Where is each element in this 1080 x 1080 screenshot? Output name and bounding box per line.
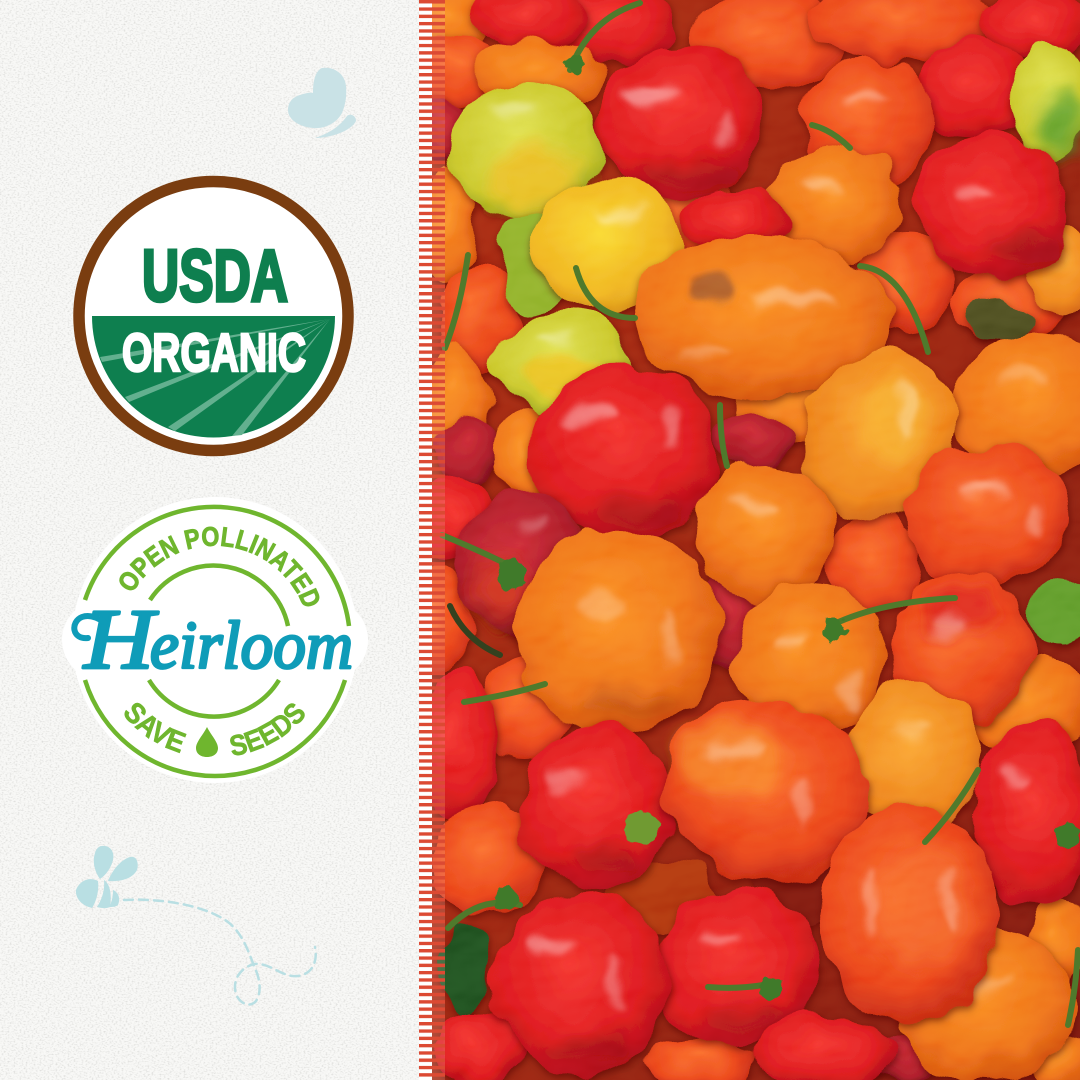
text: OPEN POLLINATED: OPEN POLLINATED: [119, 526, 320, 606]
ring arcs: [85, 507, 349, 776]
field rays: [100, 319, 330, 436]
script wordmark: Heirloom: H: [83, 591, 158, 687]
badge: USDA Organic seal: [79, 182, 348, 450]
icon: seed drop: [196, 727, 218, 757]
back layer: [410, 0, 1080, 1080]
decorative zigzag edge: [419, 0, 445, 1080]
script wordmark: Heirloom: [74, 591, 353, 687]
text: SEEDS: SEEDS: [230, 703, 305, 756]
text: SAVE: SAVE: [124, 702, 187, 754]
panel: linen background: [0, 0, 432, 1080]
heading: USDA: USDA: [142, 236, 288, 317]
script wordmark: Heirloom: eirloom: [150, 607, 353, 683]
label: green field half circle: [92, 316, 335, 438]
gloss and wrinkles: [432, 0, 1080, 1080]
panel: habanero pepper photo: [410, 0, 1080, 1080]
stems and calyxes: [442, 3, 1080, 1025]
badge: Heirloom open pollinated seal: [62, 497, 368, 783]
front layer: [449, 38, 1080, 1080]
heading: ORGANIC: ORGANIC: [122, 323, 306, 383]
icon: bee with dashed flight path: [76, 846, 316, 1005]
icon: butterfly: [288, 68, 356, 138]
